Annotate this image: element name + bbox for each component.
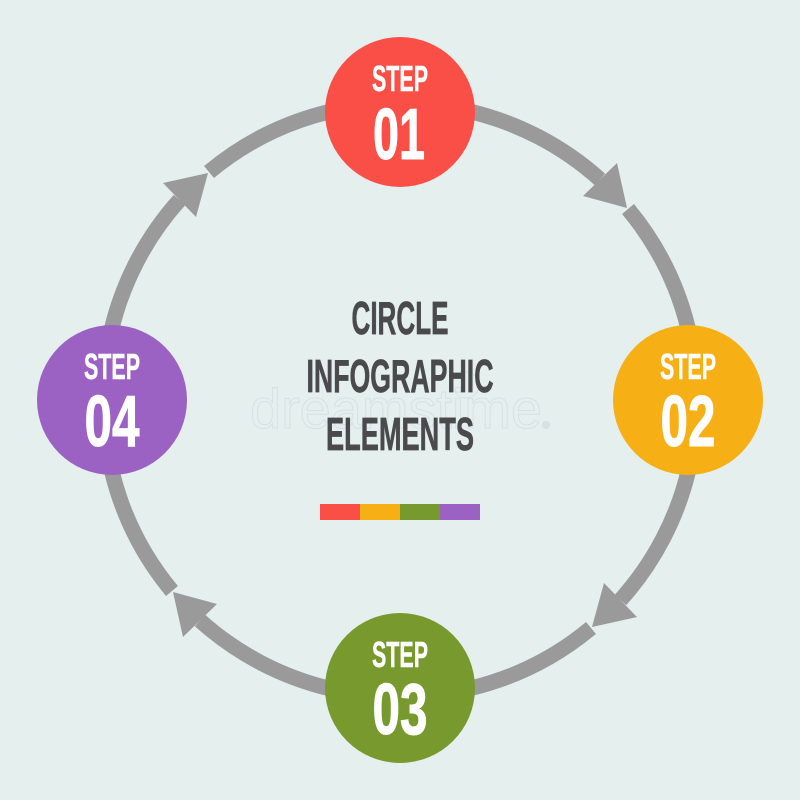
colour legend bar [320,504,480,520]
title [306,292,494,460]
step 01 badge: 01 [373,95,425,175]
step 02 badge [613,325,763,475]
arrow: step 3 to step 4 [112,472,330,689]
step 04 badge [37,325,187,475]
step 04 badge: 04 [84,382,140,462]
title: INFOGRAPHIC [306,350,494,402]
arrow: step 1 to step 2 [470,111,688,328]
step 01 badge: STEP [372,58,428,99]
step 03 badge: 03 [372,670,428,750]
step 01 badge [325,37,475,187]
step 02 badge: STEP [660,346,716,387]
title: ELEMENTS [326,408,474,460]
arrow: step 2 to step 3 [472,470,689,688]
arrow: step 4 to step 1 [111,112,328,330]
step 03 badge [325,613,475,763]
step 04 badge: STEP [84,346,140,387]
title: CIRCLE [352,292,448,344]
step 03 badge: STEP [372,634,428,675]
watermark: dreamstime [250,377,542,440]
step 02 badge: 02 [660,382,716,462]
